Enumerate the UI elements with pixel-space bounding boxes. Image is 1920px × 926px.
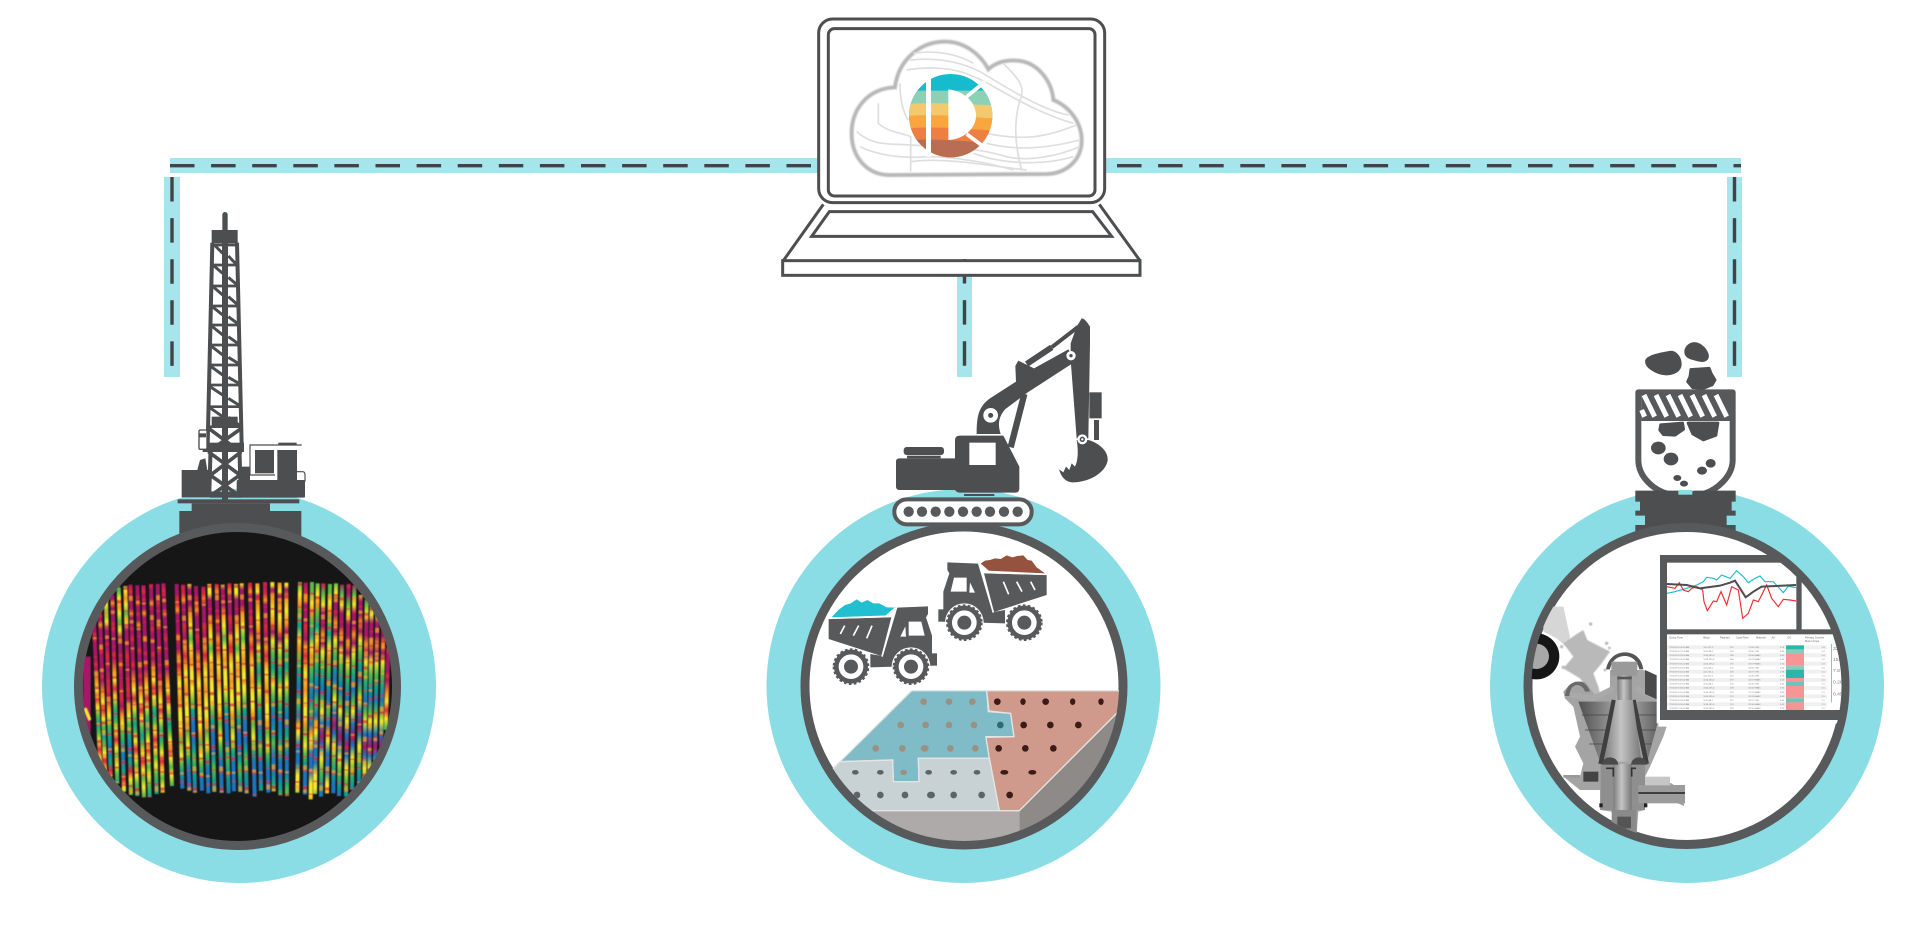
icon: excavator track xyxy=(894,499,1032,524)
table: truck dump records: 5.8 xyxy=(1822,663,1825,665)
table: truck dump records: 29.56 HMAC xyxy=(1748,703,1761,706)
table: truck dump records: Dump Time xyxy=(1669,635,1683,639)
icon: laptop with cloud logo xyxy=(783,19,1140,275)
table: truck dump records: 295 xyxy=(1730,708,1734,710)
connector: vertical line to mining xyxy=(957,259,972,377)
table: truck dump records: 101-508-1 xyxy=(1703,651,1714,653)
table: truck dump records: 18.66 CHS xyxy=(1748,651,1759,653)
table: truck dump records: 151 xyxy=(1730,647,1734,649)
table: truck dump records: 5.8 xyxy=(1822,651,1825,653)
table: truck dump records: Primary Crusher xyxy=(1805,635,1824,639)
table: truck dump records: Payload xyxy=(1720,635,1730,639)
table: truck dump records: 0.45 xyxy=(1833,691,1843,697)
table: truck dump records: 0.63 xyxy=(1780,667,1785,669)
table: truck dump records: 1016-185-3 xyxy=(1703,655,1715,657)
table: truck dump records: 7/5/2019 6:44:02 AM xyxy=(1669,670,1689,673)
table: truck dump records: 27.27 HMAC xyxy=(1748,691,1761,694)
circle: teal disc xyxy=(1490,489,1884,883)
table: truck dump records: 209 xyxy=(1730,671,1734,673)
table: truck dump records: 1016-185-3 xyxy=(1703,696,1715,698)
table: truck dump records: 21.66 CHS xyxy=(1748,647,1759,649)
table: truck dump records: 29.67 HMAC xyxy=(1748,658,1761,661)
table: truck dump records: 7/5/2019 6:45:02 AM xyxy=(1669,675,1689,678)
table: truck dump records: 20.67 CHS xyxy=(1748,671,1759,673)
table: truck dump records: 219 xyxy=(1730,700,1734,702)
table: truck dump records: 5.5 xyxy=(1822,671,1825,673)
table: truck dump records: 176 xyxy=(1730,704,1734,706)
table: truck dump records: 5.5 xyxy=(1822,688,1825,690)
table: truck dump records: 0.69 xyxy=(1780,659,1785,661)
table: truck dump records: 5.8 xyxy=(1822,647,1825,649)
panel: drilling circle xyxy=(42,212,436,883)
table: truck dump records: Motor Amps xyxy=(1805,639,1820,643)
table: truck dump records: 1016-185-4 xyxy=(1703,708,1715,710)
table: truck dump records: 195 xyxy=(1730,692,1734,694)
table: truck dump records: 5.5 xyxy=(1822,696,1825,698)
pit: side face xyxy=(1019,714,1116,831)
table: truck dump records: 34.56 HMAC xyxy=(1748,687,1761,690)
table: truck dump records: 5.5 xyxy=(1822,676,1825,678)
table: truck dump records: 176 xyxy=(1730,684,1734,686)
table: truck dump records: 32 xyxy=(1833,646,1839,652)
connector: horizontal data line left xyxy=(170,158,818,173)
table: truck dump records: 151 xyxy=(1730,676,1734,678)
circle: gauge ring xyxy=(78,528,396,846)
table: truck dump records: 0.78 xyxy=(1780,676,1785,678)
table: truck dump records: 1016-185-4 xyxy=(1703,663,1715,665)
icon: ore hopper xyxy=(1635,343,1736,538)
chart: grade trend lines xyxy=(1666,562,1831,630)
connector: vertical line to processing xyxy=(1727,177,1742,377)
table: truck dump records: 291 xyxy=(1730,663,1734,665)
table: truck dump records: 5.8 xyxy=(1822,659,1825,661)
table: truck dump records: 7/5/2019 6:46:02 AM xyxy=(1669,679,1689,682)
table: truck dump records: 0.69 xyxy=(1780,655,1785,657)
table: truck dump records: 209 xyxy=(1730,651,1734,653)
scene: blast pattern with trucks xyxy=(829,555,1122,847)
table: truck dump records: 278 xyxy=(1730,696,1734,698)
pit: front face xyxy=(872,810,1020,841)
table: truck dump records xyxy=(1667,634,1854,710)
pit zone: waste block xyxy=(832,758,999,811)
table: truck dump records: CU xyxy=(1787,635,1791,639)
table: truck dump records: Material xyxy=(1756,635,1766,639)
table: truck dump records: CycleTime xyxy=(1736,635,1749,639)
table: truck dump records: 101-717-2 xyxy=(1703,647,1714,649)
table: truck dump records: 7/5/2019 6:30:02 AM xyxy=(1669,662,1689,665)
icon: striped D logo xyxy=(908,74,992,158)
table: truck dump records: 0.70 xyxy=(1780,663,1785,665)
table: truck dump records: 0.70 xyxy=(1780,680,1785,682)
table: truck dump records: 5.8 xyxy=(1822,667,1825,669)
table: truck dump records: 7.8 xyxy=(1833,668,1840,674)
circle: gauge ring xyxy=(1528,528,1845,844)
icon: haul truck with teal ore xyxy=(829,599,937,686)
table: truck dump records: 7/5/2019 6:54:02 AM xyxy=(1669,699,1689,702)
table: truck dump records: 29.67 HMAC xyxy=(1748,662,1761,665)
table: truck dump records: 7/5/2019 6:47:02 AM xyxy=(1669,683,1689,686)
icon: falling rocks xyxy=(1646,343,1715,389)
table: truck dump records: 5.8 xyxy=(1822,655,1825,657)
table: truck dump records: 0.63 xyxy=(1780,684,1785,686)
circle: gauge ring xyxy=(805,527,1123,845)
table: truck dump records: 101-717-2 xyxy=(1703,676,1714,678)
table: truck dump records: 7/5/2019 6:26:02 AM xyxy=(1669,646,1689,649)
table: truck dump records: 5.5 xyxy=(1822,704,1825,706)
table: truck dump records: 5.5 xyxy=(1822,680,1825,682)
table: truck dump records: 7/5/2019 6:48:02 AM xyxy=(1669,687,1689,690)
panel: mining circle xyxy=(766,318,1160,883)
table: truck dump records: 7/5/2019 6:50:02 AM xyxy=(1669,691,1689,694)
scene: crusher and dashboard xyxy=(1532,555,1842,833)
table: truck dump records: 1016-185-3 xyxy=(1703,704,1715,706)
table: truck dump records: 0.70 xyxy=(1780,688,1785,690)
table: truck dump records: 0.69 xyxy=(1780,696,1785,698)
table: truck dump records: 0.78 xyxy=(1780,647,1785,649)
table: truck dump records: 7/5/2019 6:28:02 AM xyxy=(1669,654,1689,657)
table: truck dump records: 1016-185-3 xyxy=(1703,692,1715,694)
table: truck dump records: 21.56 CHS xyxy=(1748,676,1759,678)
panel: dashboard frame xyxy=(1656,675,1838,724)
table: truck dump records: 0.78 xyxy=(1780,671,1785,673)
table: truck dump records: 7/5/2019 6:53:02 AM xyxy=(1669,695,1689,698)
table: truck dump records: 0.63 xyxy=(1780,700,1785,702)
table: truck dump records: 196 xyxy=(1730,659,1734,661)
table: truck dump records: 15. xyxy=(1833,657,1840,663)
table: truck dump records: 1016-184-3 xyxy=(1703,680,1715,682)
table: truck dump records: 18.65 CHS xyxy=(1748,667,1759,669)
table: truck dump records: 7/5/2019 7:00:02 AM xyxy=(1669,707,1689,710)
table: truck dump records: 5.5 xyxy=(1822,708,1825,710)
pit zone: teal ore block xyxy=(840,691,1014,782)
table: truck dump records: 0.26 xyxy=(1833,680,1843,686)
table: truck dump records: 7/5/2019 6:56:02 AM xyxy=(1669,703,1689,706)
icon: drill rig xyxy=(178,212,305,538)
table: truck dump records: 18.56 CHS xyxy=(1748,684,1759,686)
table: truck dump records: 7/5/2019 6:30:02 AM xyxy=(1669,658,1689,661)
icon: haul truck with red ore xyxy=(938,555,1047,642)
table: truck dump records: 101-717-2 xyxy=(1703,671,1714,673)
table: truck dump records: 18.57 CHS xyxy=(1748,700,1759,702)
icon: truck tipping ore xyxy=(1532,606,1612,695)
table: truck dump records: 207 xyxy=(1730,667,1734,669)
table: truck dump records: 209 xyxy=(1730,688,1734,690)
table: truck dump records: 34.67 HMAC xyxy=(1748,679,1761,682)
table: truck dump records: 101-508-1 xyxy=(1703,700,1714,702)
icon: cone crusher xyxy=(1563,652,1685,833)
table: truck dump records: 0.70 xyxy=(1780,708,1785,710)
table: truck dump records: 0.69 xyxy=(1780,704,1785,706)
table: truck dump records: 5.5 xyxy=(1822,692,1825,694)
table: truck dump records: 20.53 HMAC xyxy=(1748,695,1761,698)
table: truck dump records: 29.66 HMAC xyxy=(1748,654,1761,657)
table: truck dump records: 7/5/2019 6:27:02 AM xyxy=(1669,650,1689,653)
table: truck dump records: 101-508-1 xyxy=(1703,667,1714,669)
table: truck dump records: 0.69 xyxy=(1780,692,1785,694)
table: truck dump records: 1016-185-3 xyxy=(1703,688,1715,690)
table: truck dump records: 7/5/2019 6:43:02 AM xyxy=(1669,666,1689,669)
pit zone: red ore block xyxy=(986,691,1122,811)
table: truck dump records: 5.5 xyxy=(1822,700,1825,702)
connector: horizontal data line right xyxy=(1105,158,1741,173)
table: truck dump records: 101-508-1 xyxy=(1703,684,1714,686)
connector: vertical line to drilling xyxy=(164,177,180,377)
table: truck dump records: 286 xyxy=(1730,655,1734,657)
table: truck dump records: 29.55 HMAC xyxy=(1748,707,1761,710)
icon: contour cloud xyxy=(852,42,1082,175)
table: truck dump records: 197 xyxy=(1730,680,1734,682)
chart: coloured drill holes xyxy=(83,582,388,799)
panel: processing circle xyxy=(1490,343,1884,883)
table: truck dump records: 1016-185-3 xyxy=(1703,659,1715,661)
table: truck dump records: AU xyxy=(1772,635,1775,639)
table: truck dump records: 0.63 xyxy=(1780,651,1785,653)
table: truck dump records: 5.5 xyxy=(1822,684,1825,686)
circle: teal disc xyxy=(42,489,436,883)
circle: teal disc xyxy=(766,489,1160,883)
icon: excavator xyxy=(894,318,1108,524)
table: truck dump records: Block xyxy=(1703,635,1710,639)
